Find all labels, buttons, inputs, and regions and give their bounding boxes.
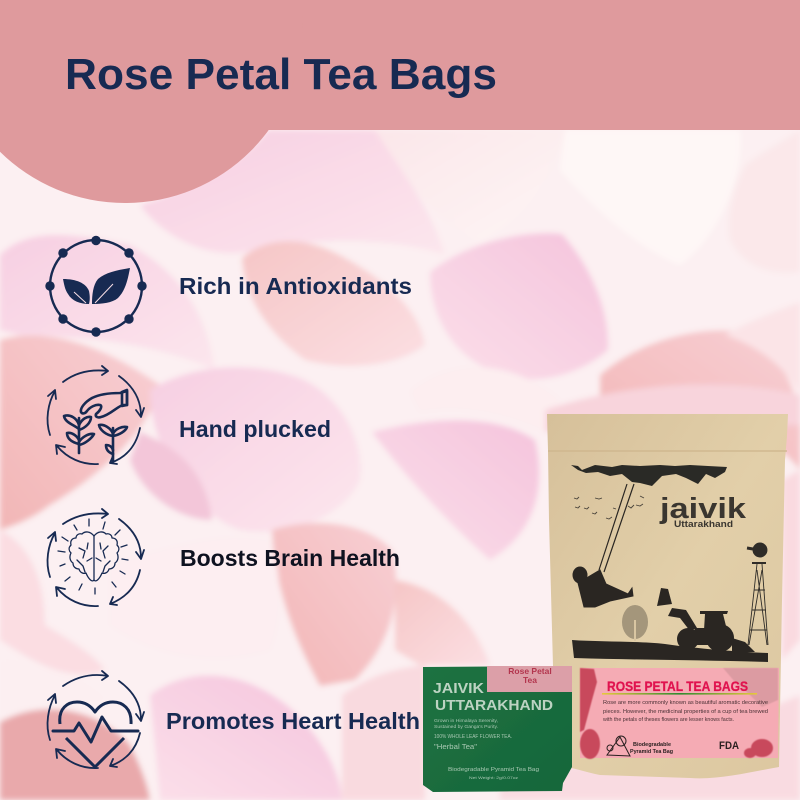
sachet details: Grown in Himalaya Serenity, bbox=[434, 718, 498, 723]
sachet brand: UTTARAKHAND bbox=[435, 698, 553, 714]
sachet details: "Herbal Tea" bbox=[434, 744, 478, 751]
pouch artwork: tree canopy bbox=[571, 465, 727, 486]
brand subtitle: Uttarakhand bbox=[674, 519, 733, 529]
title: Rose Petal Tea Bags bbox=[65, 50, 497, 99]
biodegradable text: Pyramid Tea Bag bbox=[630, 749, 673, 755]
header circle bbox=[0, 0, 303, 203]
biodegradable text bbox=[630, 742, 673, 755]
tab text bbox=[508, 666, 552, 685]
sachet body bbox=[423, 666, 572, 792]
tab text: Rose Petal bbox=[508, 666, 552, 676]
icon: heartbeat with cycle arrows bbox=[48, 671, 144, 768]
header band bbox=[0, 0, 800, 130]
sachet details: Net Weight: 2g/0.07oz bbox=[469, 775, 518, 780]
icon: pyramid tea bag bbox=[607, 736, 630, 756]
label paragraph: pieces. However, the medicinal properties of a cup of tea brewed bbox=[603, 709, 768, 715]
label paragraph: Rose are more commonly known as beautiful aromatic decorative bbox=[603, 700, 768, 706]
pouch artwork: birds bbox=[574, 496, 644, 519]
pouch artwork: windmill bbox=[747, 543, 768, 645]
label paragraph bbox=[603, 700, 768, 723]
biodegradable text: Biodegradable bbox=[633, 742, 671, 748]
feature: hand plucked bbox=[48, 366, 331, 464]
pouch logo bbox=[659, 493, 747, 529]
pouch pink label bbox=[580, 668, 779, 759]
sachet brand bbox=[433, 681, 553, 714]
sachet details: Biodegradable Pyramid Tea Bag bbox=[448, 767, 539, 773]
icon: brain with cycle arrows bbox=[48, 509, 144, 606]
sachet details: Sustained by Ganga's Purity. bbox=[434, 724, 498, 729]
label: Promotes Heart Health bbox=[166, 708, 420, 734]
sachet brand: JAIVIK bbox=[433, 681, 485, 697]
brand name: jaivik bbox=[659, 493, 747, 525]
sachet details: 100% WHOLE LEAF FLOWER TEA. bbox=[434, 734, 512, 740]
sachet details bbox=[434, 718, 539, 780]
pouch artwork: tractor and ground bbox=[572, 588, 768, 662]
tab text: Tea bbox=[523, 675, 537, 685]
product: kraft pouch bbox=[547, 414, 788, 778]
label decoration: roses bbox=[580, 668, 773, 759]
product: green sachet bbox=[423, 666, 572, 792]
label: Rich in Antioxidants bbox=[179, 273, 412, 299]
label heading: ROSE PETAL TEA BAGS bbox=[607, 678, 748, 694]
icon: hand and plants with cycle arrows bbox=[48, 366, 144, 464]
label paragraph: with the petals of theses flowers are lesser knows facts. bbox=[603, 717, 734, 723]
feature: promotes heart health bbox=[48, 671, 420, 768]
pouch artwork: small tree bbox=[622, 605, 648, 641]
feature: rich in antioxidants bbox=[45, 236, 412, 337]
FDA mark: FDA bbox=[719, 740, 739, 752]
icon: leaves in dotted ring bbox=[45, 236, 147, 337]
sachet pink tab bbox=[487, 666, 572, 692]
label rule bbox=[602, 693, 757, 695]
feature: boosts brain health bbox=[48, 509, 400, 606]
label: Hand plucked bbox=[179, 416, 331, 442]
pouch body bbox=[547, 414, 788, 778]
pouch artwork: swing and child bbox=[573, 484, 634, 607]
label: Boosts Brain Health bbox=[180, 545, 400, 571]
label decoration: floral corner bbox=[723, 668, 778, 707]
